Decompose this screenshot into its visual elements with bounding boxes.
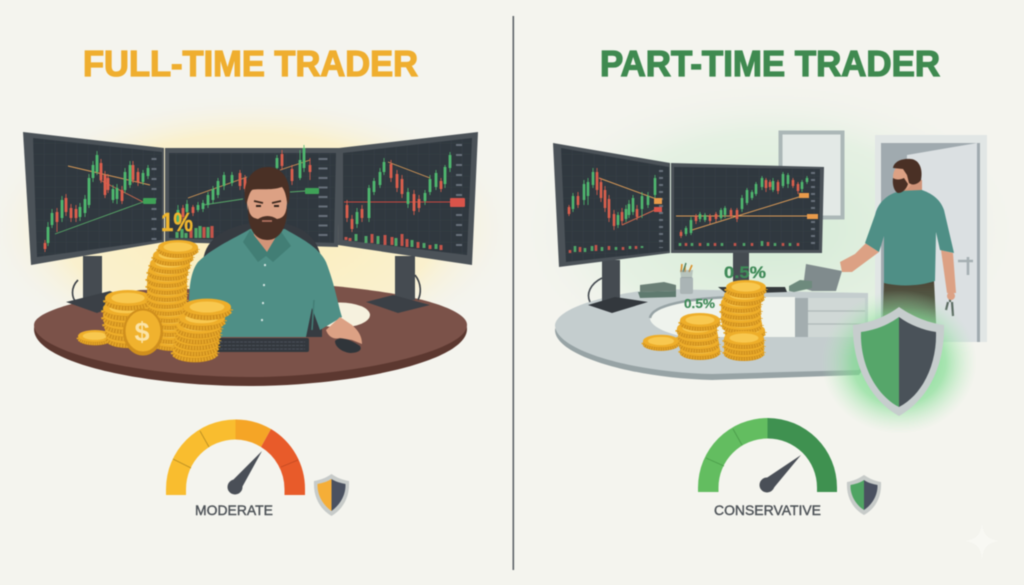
left coin stack: [103, 290, 151, 348]
face: [247, 177, 287, 229]
monitor right: [671, 163, 824, 253]
mouse: [335, 339, 361, 353]
trader: [189, 167, 342, 337]
gauge label: CONSERVATIVE: [714, 503, 821, 518]
dollar coin: [123, 308, 163, 356]
keyboard: [217, 338, 309, 352]
monitor left: [23, 132, 164, 265]
tall coin stack: [721, 280, 766, 341]
monitor right: [338, 132, 478, 265]
coins: [78, 240, 231, 362]
face: [893, 164, 913, 190]
beard: [248, 205, 287, 240]
label: 1%: 1%: [161, 207, 193, 237]
panel: full-time trader scene: [23, 132, 478, 386]
monitor left: [553, 143, 670, 267]
holding hand: [947, 292, 955, 300]
trousers: [882, 280, 937, 342]
monitor centre: [165, 145, 340, 247]
neck: [254, 222, 281, 256]
laptop: [803, 264, 842, 291]
label: 0.5% lower: 0.5%: [684, 297, 715, 311]
gauge arc: [698, 418, 837, 492]
background glow: full-time side: [0, 93, 520, 363]
monitor stands: [66, 256, 430, 313]
centre divider: [512, 16, 514, 570]
desk drawers: [795, 298, 865, 337]
hair: [245, 167, 289, 205]
buttons: [262, 265, 265, 320]
loose coin: [643, 335, 679, 351]
collar: [243, 230, 291, 262]
dollar coin: $: [134, 317, 150, 347]
chair: [203, 222, 322, 337]
shirt: [189, 229, 342, 337]
left coin stack: [677, 313, 720, 360]
sparkle watermark: [965, 523, 999, 560]
walking trader: [840, 159, 956, 342]
eyes and brows: [254, 201, 281, 203]
gauge needle: [760, 455, 801, 492]
wall picture: [780, 132, 842, 218]
background glow: part-time side: [520, 80, 1020, 380]
shield glow: [821, 290, 977, 434]
arms: [840, 243, 956, 293]
gauge: conservative: [698, 418, 881, 518]
desk: [555, 289, 880, 380]
label: 0.5% upper: 0.5%: [724, 263, 766, 282]
door: [875, 135, 987, 342]
desk: [34, 286, 467, 386]
pencil cup: [680, 263, 693, 294]
desk books: [638, 282, 676, 298]
small shield: [314, 474, 349, 516]
right coin stack: [724, 331, 764, 361]
gauge label: MODERATE: [195, 503, 273, 518]
dark keyboard: [718, 287, 787, 294]
coins: [643, 280, 766, 361]
large shield: [853, 307, 944, 416]
gauge needle: [228, 451, 262, 494]
neck: [903, 180, 922, 196]
title: full-time trader: FULL-TIME TRADER: [83, 43, 418, 84]
beard: [893, 178, 908, 193]
hand: [326, 317, 362, 344]
title: part-time trader: PART-TIME TRADER: [600, 43, 940, 84]
small shield: [847, 475, 881, 515]
hair: [893, 159, 922, 184]
gauge arc: [166, 419, 305, 495]
loose coin: [78, 330, 112, 345]
monitor stands: [588, 252, 749, 313]
small box: [789, 280, 812, 292]
keys: [946, 296, 953, 316]
right coin stack: [173, 299, 231, 362]
panel: part-time trader scene: [553, 132, 987, 434]
gauge: moderate: [166, 419, 349, 518]
tall coin stack: [147, 240, 198, 351]
shirt: [865, 190, 954, 285]
